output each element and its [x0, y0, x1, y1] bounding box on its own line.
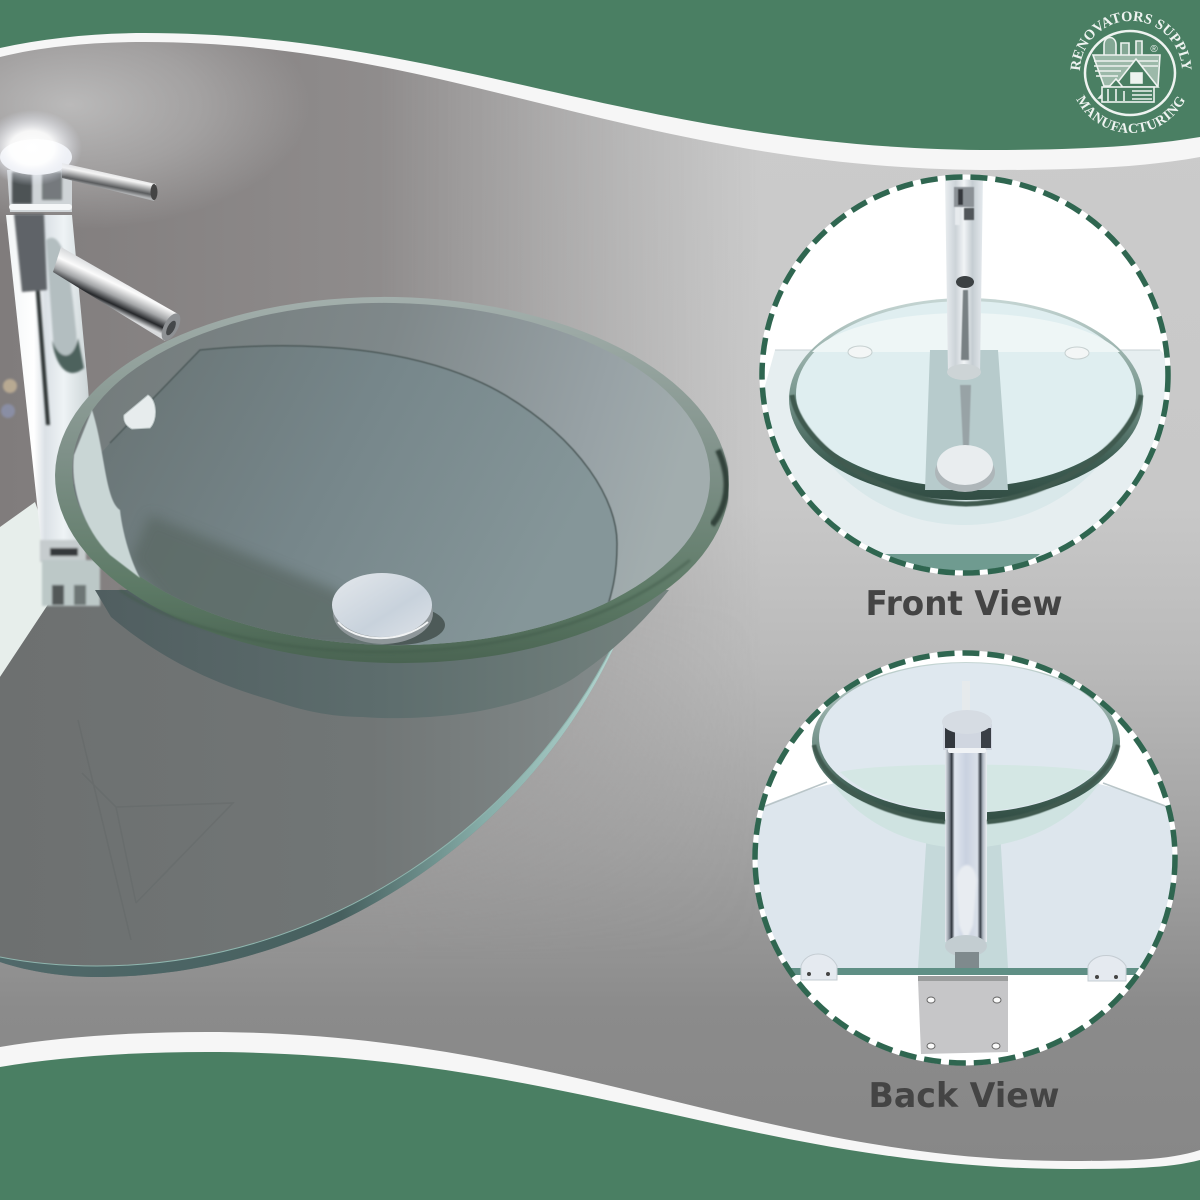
bowl interior: [69, 297, 713, 651]
back view upper mounting plate: [918, 830, 1008, 968]
label: back view: Back View: [868, 1076, 1060, 1116]
front view dashed border: [762, 177, 1168, 573]
front view clips: [848, 346, 872, 358]
wall bracket: [0, 502, 53, 677]
logo text: RENOVATORS SUPPLY: [1070, 11, 1192, 71]
back view clips: [801, 954, 1126, 981]
back view shelf: [758, 784, 1172, 968]
logo: Renovators Supply Manufacturing: MANUFACTURING: [1076, 94, 1184, 134]
faucet handle lever: [62, 163, 156, 201]
back view dashed border: [755, 653, 1175, 1063]
bowl basin underside: [95, 590, 669, 718]
back view lower plate: [918, 976, 1008, 1054]
faucet base: [40, 540, 100, 606]
front view rim foreground: [792, 395, 1141, 504]
inset: front view circle: [750, 175, 1180, 575]
bottom green wave: [0, 1032, 1200, 1200]
faucet: [0, 110, 184, 606]
back view rim foreground: [814, 745, 1118, 822]
inset: back view circle: [745, 651, 1185, 1065]
main product photo: glass vessel sink with chrome faucet: [0, 110, 732, 977]
logo registered mark: ®: [1150, 44, 1158, 55]
glass clip: [124, 395, 155, 429]
bokeh reflections: [1, 379, 17, 418]
front view plate: [925, 350, 1008, 490]
back view bowl: [830, 780, 1101, 846]
front view faucet: [945, 175, 983, 458]
faucet reflection in glass: [73, 410, 140, 578]
front view drain: [935, 445, 995, 492]
top green wave banner: [0, 0, 1200, 170]
faucet spout: [53, 247, 178, 341]
label: front view: Front View: [866, 584, 1062, 624]
bottom rim shading: [120, 560, 690, 652]
logo house: [1093, 38, 1160, 102]
bowl floor: [60, 346, 617, 660]
front view shelf: [750, 350, 1180, 557]
glass bowl rim: [52, 291, 732, 669]
logo: Renovators Supply Manufacturing: [1070, 11, 1192, 134]
back view glass edge: [780, 968, 1145, 975]
glass shelf: [0, 597, 615, 977]
back view faucet: [942, 710, 992, 968]
front view bowl: [830, 464, 1097, 525]
drain: [332, 573, 445, 645]
